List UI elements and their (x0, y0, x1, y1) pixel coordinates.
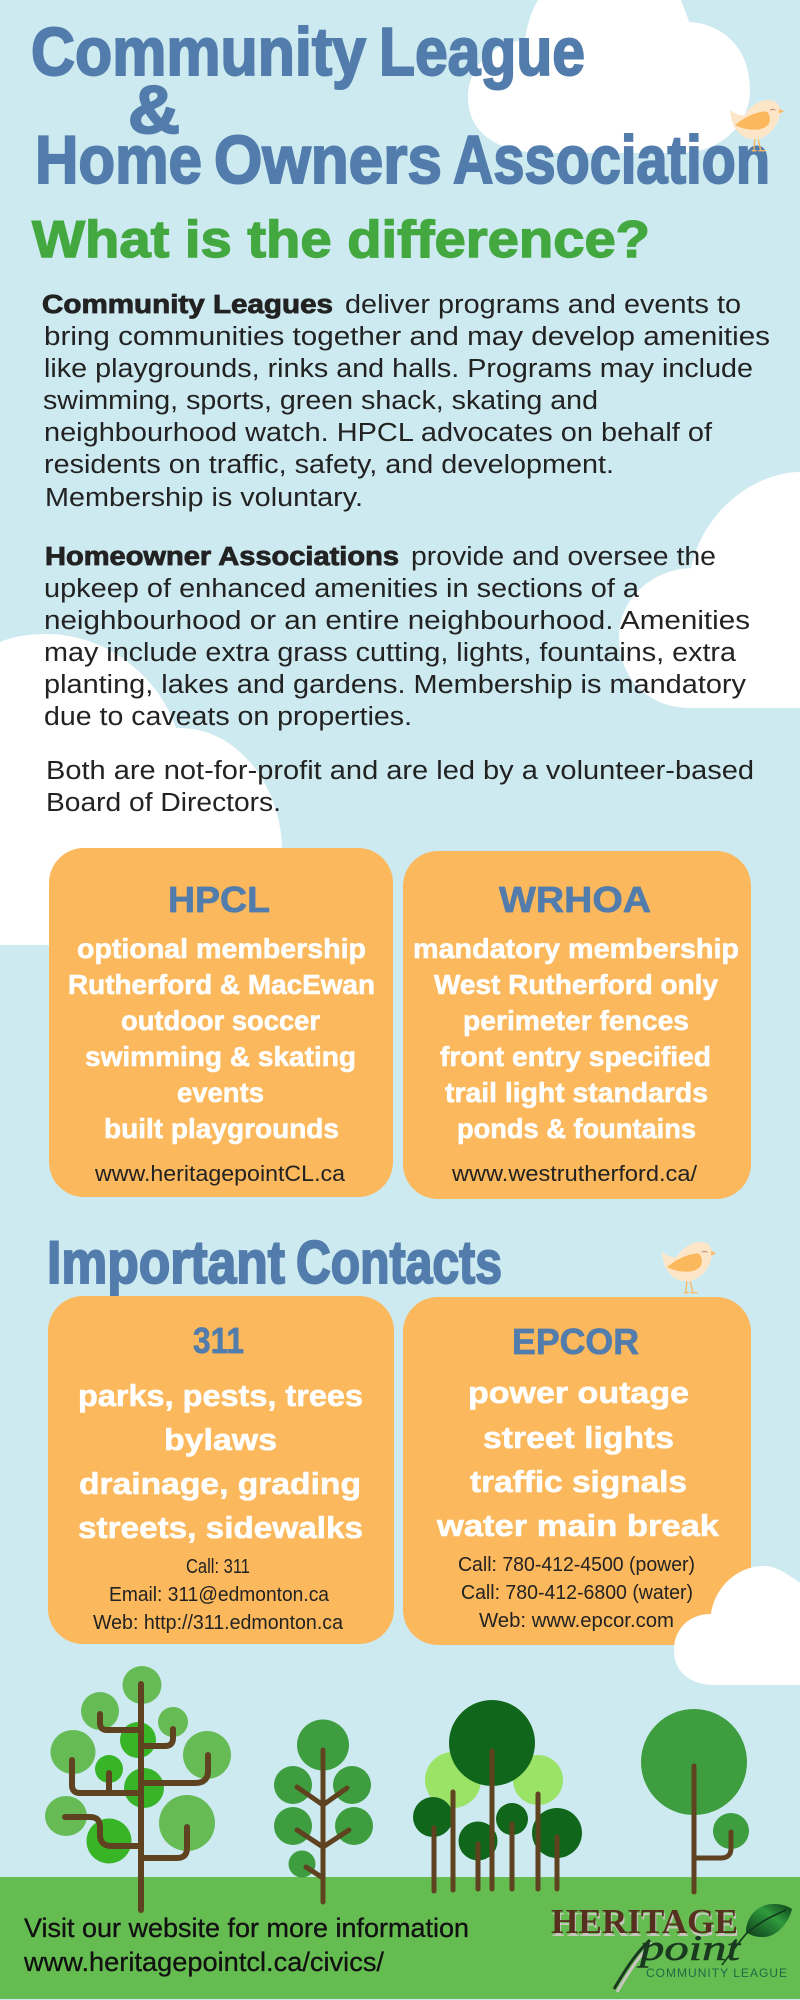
logo: Heritage Point Community League: COMMUNITY LEAGUE (646, 1966, 787, 1980)
WRHOA feature list (413, 933, 739, 1144)
EPCOR topic list: traffic signals (470, 1464, 687, 1499)
EPCOR topic list: water main break (436, 1508, 720, 1543)
WRHOA feature list: front entry specified (440, 1041, 711, 1072)
HPCL feature list: optional membership (77, 933, 366, 964)
WRHOA website: www.westrutherford.ca/ (451, 1161, 698, 1186)
311 contact details (93, 1556, 344, 1634)
WRHOA feature list: mandatory membership (413, 933, 739, 964)
title (31, 14, 770, 198)
tree 1 (45, 1666, 231, 1910)
logo: Heritage Point Community League (551, 1902, 792, 1992)
title: Home (35, 122, 202, 198)
panel heading: 311: 311 (193, 1320, 244, 1361)
WRHOA feature list: perimeter fences (463, 1005, 689, 1036)
WRHOA feature list: West Rutherford only (434, 969, 718, 1000)
panel heading: HPCL: HPCL (168, 879, 270, 920)
EPCOR contact details: Web: www.epcor.com (479, 1610, 674, 1632)
text block: homeowner associations: neighbourhood or an entire neighbourhood. Amenities (44, 607, 750, 635)
text block: community leagues: swimming, sports, green shack, skating and (43, 387, 598, 415)
cloud: bottom right (674, 1566, 800, 1685)
311 topic list (78, 1378, 363, 1545)
cloud: top right (468, 0, 750, 153)
EPCOR topic list (436, 1375, 720, 1543)
EPCOR topic list: power outage (468, 1375, 689, 1410)
text block: homeowner associations: provide and oversee the (411, 543, 716, 571)
panel: WRHOA (403, 851, 751, 1199)
text block: both not-for-profit (46, 757, 754, 817)
311 topic list: drainage, grading (79, 1466, 361, 1501)
text block: homeowner associations: due to caveats on properties. (44, 703, 412, 731)
text block: both not-for-profit: Both are not-for-profit and are led by a volunteer-based (46, 757, 754, 785)
logo leaf (722, 1904, 792, 1965)
footer text (23, 1913, 469, 1977)
text block: community leagues: deliver programs and events to (345, 291, 741, 319)
panel heading: EPCOR: EPCOR (512, 1321, 639, 1362)
logo: Heritage Point Community League: point (636, 1928, 741, 1968)
EPCOR contact details: Call: 780-412-6800 (water) (461, 1582, 693, 1604)
HPCL feature list: built playgrounds (104, 1113, 339, 1144)
tree group 3 (413, 1700, 582, 1891)
HPCL feature list: events (177, 1077, 264, 1108)
WRHOA feature list: trail light standards (445, 1077, 708, 1108)
ground (0, 1877, 800, 1999)
footer text: www.heritagepointcl.ca/civics/ (23, 1947, 384, 1977)
heading: important contacts (47, 1229, 502, 1296)
footer text: Visit our website for more information (24, 1913, 469, 1943)
title: Community (31, 14, 366, 90)
311 contact details: Web: http://311.edmonton.ca (93, 1612, 344, 1634)
text block: community leagues: neighbourhood watch. HPCL advocates on behalf of (44, 419, 713, 447)
panel: HPCL (49, 848, 393, 1197)
panel: EPCOR (403, 1297, 751, 1645)
text block: community leagues: like playgrounds, rinks and halls. Programs may include (44, 355, 753, 383)
311 contact details: Email: 311@edmonton.ca (109, 1584, 330, 1606)
logo: Heritage Point Community League: HERITAGE (552, 1905, 739, 1944)
text block: community leagues: Community Leagues (42, 291, 333, 319)
EPCOR topic list: street lights (483, 1420, 674, 1455)
title: & (128, 72, 180, 148)
cloud: middle left (0, 634, 282, 945)
tree 4 (641, 1709, 749, 1892)
HPCL feature list (68, 933, 375, 1144)
tree 2 (274, 1720, 373, 1902)
text block: both not-for-profit: Board of Directors. (46, 789, 281, 817)
HPCL website: www.heritagepointCL.ca (94, 1161, 346, 1186)
HPCL feature list: Rutherford & MacEwan (68, 969, 375, 1000)
subtitle: What is the difference? (32, 211, 650, 269)
text block: community leagues: residents on traffic, safety, and development. (44, 451, 614, 479)
heading: important contacts: Important (47, 1229, 285, 1296)
panel: 311 (48, 1296, 394, 1644)
311 topic list: parks, pests, trees (78, 1378, 363, 1413)
logo: Heritage Point Community League: HERITAGE (551, 1902, 738, 1941)
icon: bird on contacts (662, 1242, 716, 1293)
text block: homeowner associations: Homeowner Associations (45, 543, 399, 571)
text block: homeowner associations (44, 543, 750, 731)
EPCOR contact details (458, 1554, 695, 1632)
icon: bird on title (730, 100, 784, 151)
HPCL feature list: outdoor soccer (121, 1005, 320, 1036)
text block: community leagues (42, 291, 770, 512)
WRHOA feature list: ponds & fountains (457, 1113, 696, 1144)
text block: community leagues: bring communities together and may develop amenities (44, 323, 770, 351)
cloud: middle right (619, 472, 800, 708)
311 topic list: streets, sidewalks (78, 1510, 363, 1545)
311 contact details: Call: 311 (186, 1556, 250, 1578)
text block: community leagues: Membership is voluntary. (45, 484, 363, 512)
title: Owners (214, 122, 442, 198)
title: League (379, 14, 585, 90)
text block: homeowner associations: may include extra grass cutting, lights, fountains, extra (44, 639, 737, 667)
heading: important contacts: Contacts (296, 1229, 502, 1296)
text block: homeowner associations: upkeep of enhanced amenities in sections of a (44, 575, 640, 603)
EPCOR contact details: Call: 780-412-4500 (power) (458, 1554, 695, 1576)
311 topic list: bylaws (164, 1422, 277, 1457)
panel heading: WRHOA: WRHOA (499, 879, 651, 920)
text block: homeowner associations: planting, lakes and gardens. Membership is mandatory (44, 671, 746, 699)
HPCL feature list: swimming & skating (85, 1041, 356, 1072)
